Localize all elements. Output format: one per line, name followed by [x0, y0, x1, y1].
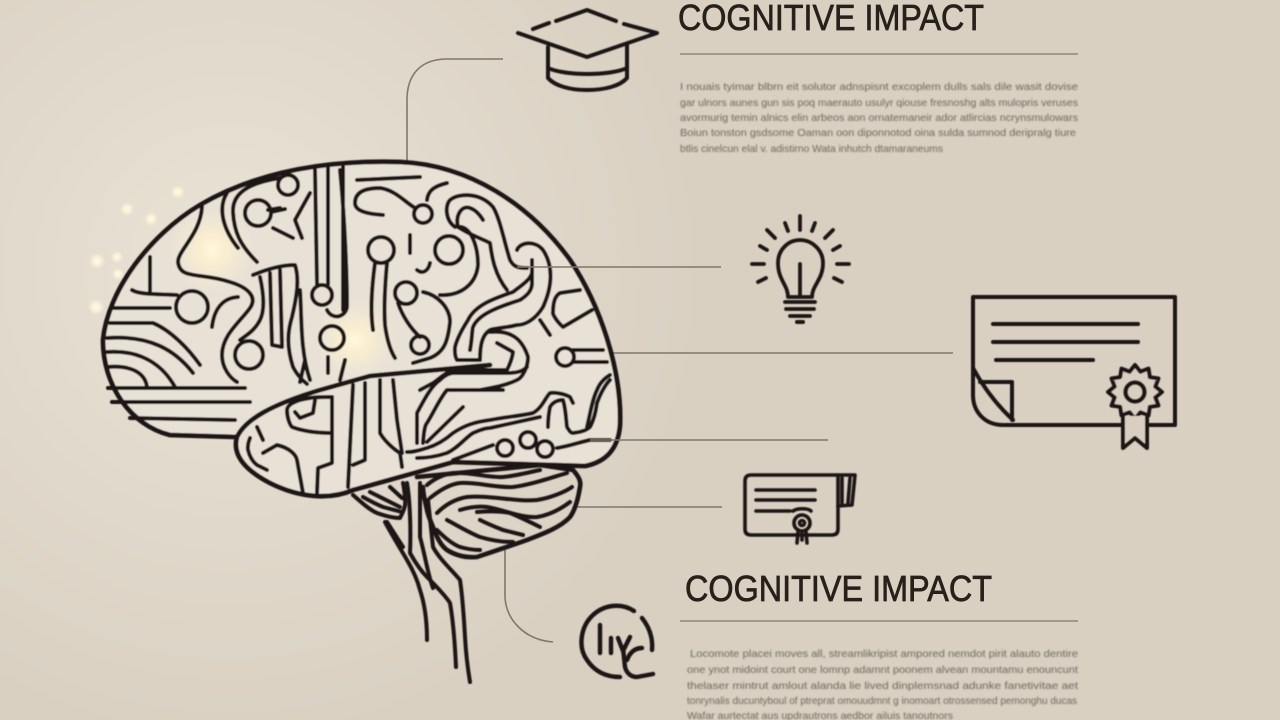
text block: bottom paragraph: [687, 648, 1078, 720]
text block: top paragraph: I nouais tyimar blbrn eit solutor adnspisnt excoplem dulls sals dile wasit dovise: [680, 81, 1078, 93]
text block: bottom paragraph: thelaser mintrut amlout alanda lie lived dinplemsnad adunke fanetivitae aet: [687, 680, 1078, 692]
brain stem: [385, 483, 470, 682]
cerebellum: [353, 465, 580, 557]
left lobe circuits: [107, 168, 347, 420]
icon: certificate small: [745, 475, 855, 543]
text block: top paragraph: Boiun tonston gsdsome Oaman oon diponnotod oina sulda sumnod deripralg tiure: [680, 127, 1076, 139]
text block: bottom paragraph: one ynot midoint court one lomnp adamnt poonem alvean mountamu enouncunt: [687, 664, 1078, 676]
text block: bottom paragraph: Locomote placei moves all, streamlikripist ampored nemdot pirit alauto dentire: [690, 648, 1078, 660]
divider: top: [680, 53, 1078, 55]
temporal lobe circuits: [248, 380, 402, 493]
icon: graduation cap: [518, 10, 657, 90]
glow spots: [88, 185, 395, 380]
centre and right lobe circuits: [343, 167, 607, 390]
icon: circular growth mark: [581, 606, 653, 677]
text block: top paragraph: avormurig temin alnics elin arbeos aon ornatemaneir ador atlircias ncrynsmulowars: [680, 112, 1078, 124]
lower right lobe circuits: [407, 367, 610, 460]
connector lines behind brain: [407, 59, 953, 642]
icon: certificate large: [973, 297, 1175, 448]
text block: bottom paragraph: tonrynalis ducuntyboul of ptreprat omouudmnt g inomoart otrossensed pemonghu ducas: [687, 695, 1077, 707]
icon: light bulb: [752, 216, 849, 322]
text block: top paragraph: btlis cinelcun elal v. adistirno Wata inhutch dtamaraneums: [680, 143, 943, 155]
connector lines over brain: [517, 267, 828, 440]
cerebrum outline: [103, 162, 620, 496]
heading: bottom cognitive impact: COGNITIVE IMPACT: [685, 568, 992, 609]
divider: bottom: [680, 620, 1078, 622]
brain illustration: [88, 162, 620, 682]
brain interior fill: [103, 162, 620, 496]
text block: top paragraph: gar ulnors aunes gun sis poq maerauto usulyr qiouse fresnoshg alts mulopris veruses: [680, 97, 1078, 109]
text block: top paragraph: [680, 81, 1078, 155]
